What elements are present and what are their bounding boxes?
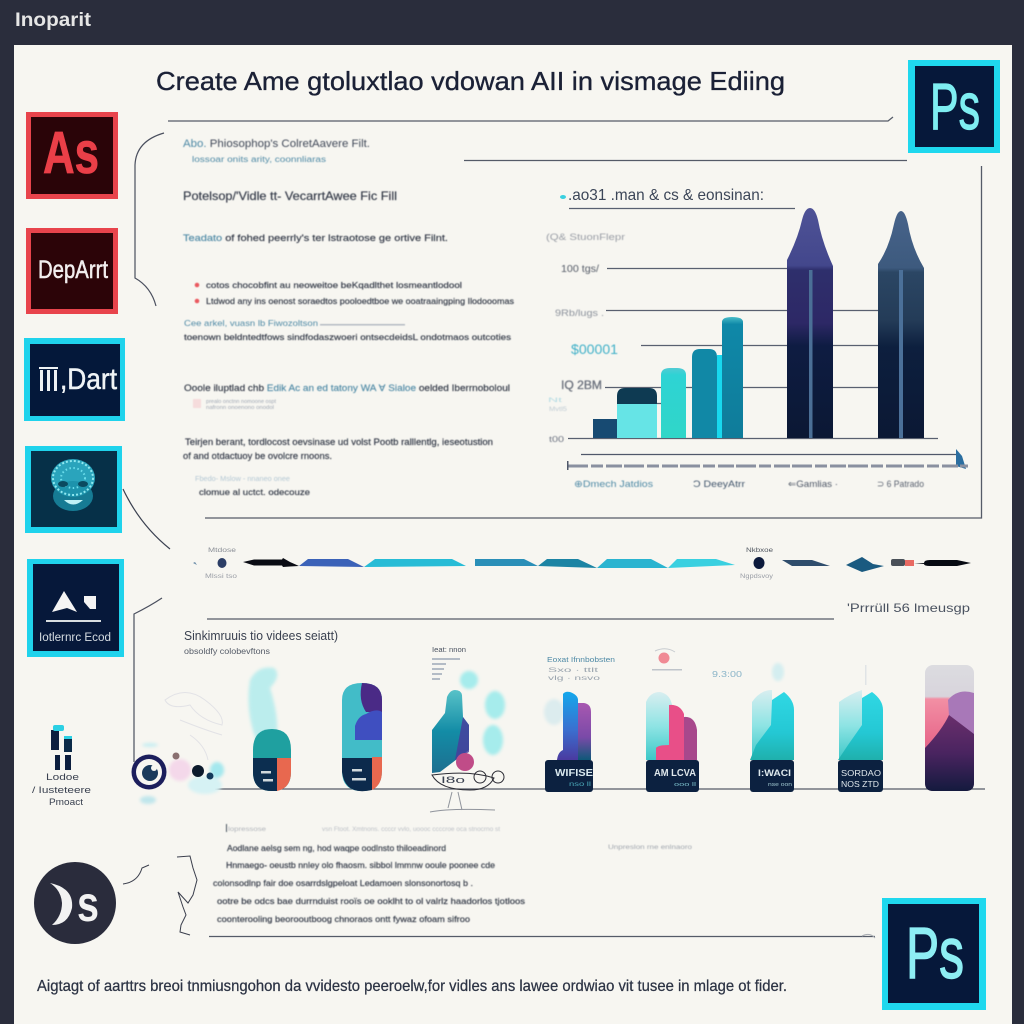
section label: 'Prrrüll 56 lmeusgp xyxy=(847,601,970,615)
text block: article copy: of and otdactuoy be ovolcre rnoons. xyxy=(183,451,332,461)
axis labels and gridlines xyxy=(546,195,938,444)
icon: DepArrt xyxy=(26,228,118,314)
icon: As xyxy=(26,112,118,199)
shape D: Eoxat Ifnnbobsten xyxy=(547,655,615,664)
axis labels and gridlines: Nt xyxy=(548,398,563,404)
icon: A badge: Iotlernrc Ecod xyxy=(39,632,111,644)
legend labels: Ɔ DeeyAtrr xyxy=(693,479,745,490)
small bar icon with label xyxy=(32,725,91,808)
shape E: AM LCVA xyxy=(654,768,696,779)
bracket connector lower xyxy=(134,598,162,762)
text block: article copy: nafronn onoenono onodol xyxy=(206,405,274,411)
icon: face xyxy=(25,446,122,533)
footer text: Aigtagt of aarttrs breoi tnmiusngohon da vvidesto peeroelw,for vidles ans lawee ordwiao vit tusee in mlage ot fider. xyxy=(37,978,787,995)
text block: lower copy: colonsodlnp fair doe osarrdslgpeloat Ledamoen slonsonortosq b . xyxy=(213,878,473,888)
axis labels and gridlines: Mvtl5 xyxy=(549,407,568,413)
timeline legend axis xyxy=(567,449,968,470)
connector from face icon xyxy=(123,489,170,549)
shape G: NOS ZTD xyxy=(841,779,879,789)
legend labels: ⊕Dmech Jatdios xyxy=(574,479,653,490)
shape E: ooo ll xyxy=(674,782,696,788)
shape C with sketch: Ieat: nnon xyxy=(432,647,466,654)
shape C with sketch: I8o xyxy=(441,775,465,785)
axis labels and gridlines: 9Rb/lugs . xyxy=(555,308,604,319)
text block: lower copy: Hnmaego- oeustb nnley olo fhaosm. sibbol lmmnw ooule poonee cde xyxy=(226,860,495,870)
icon: Dart xyxy=(24,338,125,421)
legend labels: ⊃ 6 Patrado xyxy=(877,479,924,490)
text block: lower copy: Aodlane aelsg sem ng, hod waqpe oodlnsto thiloeadinord xyxy=(227,843,446,853)
top frame lines xyxy=(168,117,982,518)
text block: lower copy: Unpreslon rne enlnaoro xyxy=(608,844,692,851)
shape F: nse oon xyxy=(768,782,792,788)
small bar icon with label: / Iusteteere xyxy=(32,785,91,796)
text block: article copy: Potelsop/'Vidle tt- VecarrtAwee Fic Fill xyxy=(183,189,397,203)
text block: article copy: Abo. Phiosophop's ColretAavere Filt. xyxy=(183,138,370,150)
icon: Ps bottom right xyxy=(882,898,986,1010)
text block: article copy: Cee arkel, vuasn lb Fiwozoltson xyxy=(184,318,318,328)
icon: Dart: ,Dart xyxy=(60,363,118,396)
tall bar two xyxy=(878,211,924,438)
text block: article copy: cotos chocobfint au neoweitoe beKqadlthet losmeantlodool xyxy=(206,280,462,290)
timeline wave row: Nkbxoe xyxy=(746,547,773,554)
icon: As: As xyxy=(43,120,99,186)
axis labels and gridlines: (Q& StuonFlepr xyxy=(546,232,625,242)
text block: lower copy: coonterooling beorooutboog chnoraos ontt fywaz ofoam sifroo xyxy=(217,914,470,924)
text block: article copy: toenown beldntedtfows sindfodaszwoeri ontsecdeidsL ondotmaos outcoties xyxy=(184,332,511,342)
faded caption top lower: lopressose xyxy=(228,826,266,833)
shape G xyxy=(838,665,883,792)
faded caption top lower: vsn Ftoot. Xmtnons. ccccr vvlo, uoooc ccccroe oca stnocrno st xyxy=(322,827,500,833)
shape F: 9.3:00 xyxy=(712,669,742,679)
sketch lines xyxy=(123,856,197,935)
shape E xyxy=(646,649,699,792)
small bar icon with label: Lodoe xyxy=(46,772,79,783)
brand name: Inoparit xyxy=(15,10,92,31)
axis labels and gridlines: IQ 2BM xyxy=(561,378,602,392)
icon: Ps bottom right: Ps xyxy=(906,914,964,994)
icon: Ps round logo xyxy=(34,862,116,944)
timeline wave row: Ngpdsvoy xyxy=(740,574,773,580)
text block: article copy: Teirjen berant, tordlocost oevsinase ud volst Pootb ralllentlg, ieseotustion xyxy=(185,437,493,447)
axis labels and gridlines: $00001 xyxy=(571,341,618,357)
shape F: I:WACI xyxy=(758,768,791,779)
text block: article copy: Teadato of fohed peerrly's ter lstraotose ge ortive Filnt. xyxy=(183,233,448,244)
text block: article copy: lossoar onits arity, coonnliaras xyxy=(192,155,326,164)
text block: article copy: Fbedo- Mslow - nnaneo onee xyxy=(195,476,290,483)
illustration: eye cluster xyxy=(132,692,224,804)
text block: article copy: clomue al uctct. odecouze xyxy=(199,487,310,497)
title: Create Ame gtoluxtlao vdowan AII in vismage Ediing xyxy=(156,66,785,96)
small bar icon with label: Pmoact xyxy=(49,797,83,808)
section subheading: obsoldfy colobevftons xyxy=(184,647,270,656)
shape D: Sxo · ttlt xyxy=(548,668,599,674)
text block: article copy: prealo onctnn nomoone ospt xyxy=(206,399,277,405)
shape C with sketch xyxy=(430,647,505,812)
shape D xyxy=(544,655,615,792)
legend labels xyxy=(574,479,924,490)
text block: article copy xyxy=(183,138,514,497)
faded caption top lower xyxy=(226,824,500,833)
shape D: vlg · nsvo xyxy=(548,676,601,682)
section heading: Sinkimruuis tio videes seiatt) xyxy=(184,629,338,643)
icon: Ps top right: Ps xyxy=(930,69,980,143)
icon: A badge xyxy=(27,559,124,657)
text block: lower copy: ootre be odcs bae durrnduist rooïs oe ooklht to ol valrlz haadorlos tjotloos xyxy=(217,896,525,906)
axis labels and gridlines: t00 xyxy=(549,435,565,444)
axis labels and gridlines: 100 tgs/ xyxy=(561,263,599,275)
timeline wave row: Mlssi tso xyxy=(205,574,238,580)
chart: bar chart xyxy=(546,187,938,444)
icon: Ps top right xyxy=(908,60,1000,153)
text block: lower copy xyxy=(213,843,692,924)
small bars xyxy=(593,317,743,438)
frame lines lower section xyxy=(207,619,985,936)
shape A xyxy=(248,668,291,791)
text block: article copy: Ltdwod any ins oenost soraedtos pooloedtboe we ooatraaingping Ilodooomas xyxy=(206,296,514,306)
hook at lower line end xyxy=(862,934,875,938)
tall bar one xyxy=(787,208,833,438)
shape D: WIFISE xyxy=(555,768,593,779)
shape B xyxy=(342,683,382,791)
legend labels: ⇐Gamlias · xyxy=(788,479,838,490)
bracket connector top xyxy=(135,133,164,306)
timeline wave row xyxy=(193,547,971,580)
shape G: SORDAO xyxy=(841,768,881,778)
text block: article copy: Ooole iluptlad chb Edik Ac an ed tatony WA Ɐ Sialoe oelded Iberrnoboloul xyxy=(184,383,510,393)
shape H xyxy=(925,665,974,791)
timeline wave row: Mtdose xyxy=(208,548,237,554)
shape D: nso ll xyxy=(569,782,591,788)
icon: DepArrt: DepArrt xyxy=(38,256,108,284)
shape F xyxy=(712,663,794,792)
icon: Ps round logo: s xyxy=(77,876,99,932)
chart heading: .ao31 .man & cs & eonsinan: xyxy=(568,187,764,204)
